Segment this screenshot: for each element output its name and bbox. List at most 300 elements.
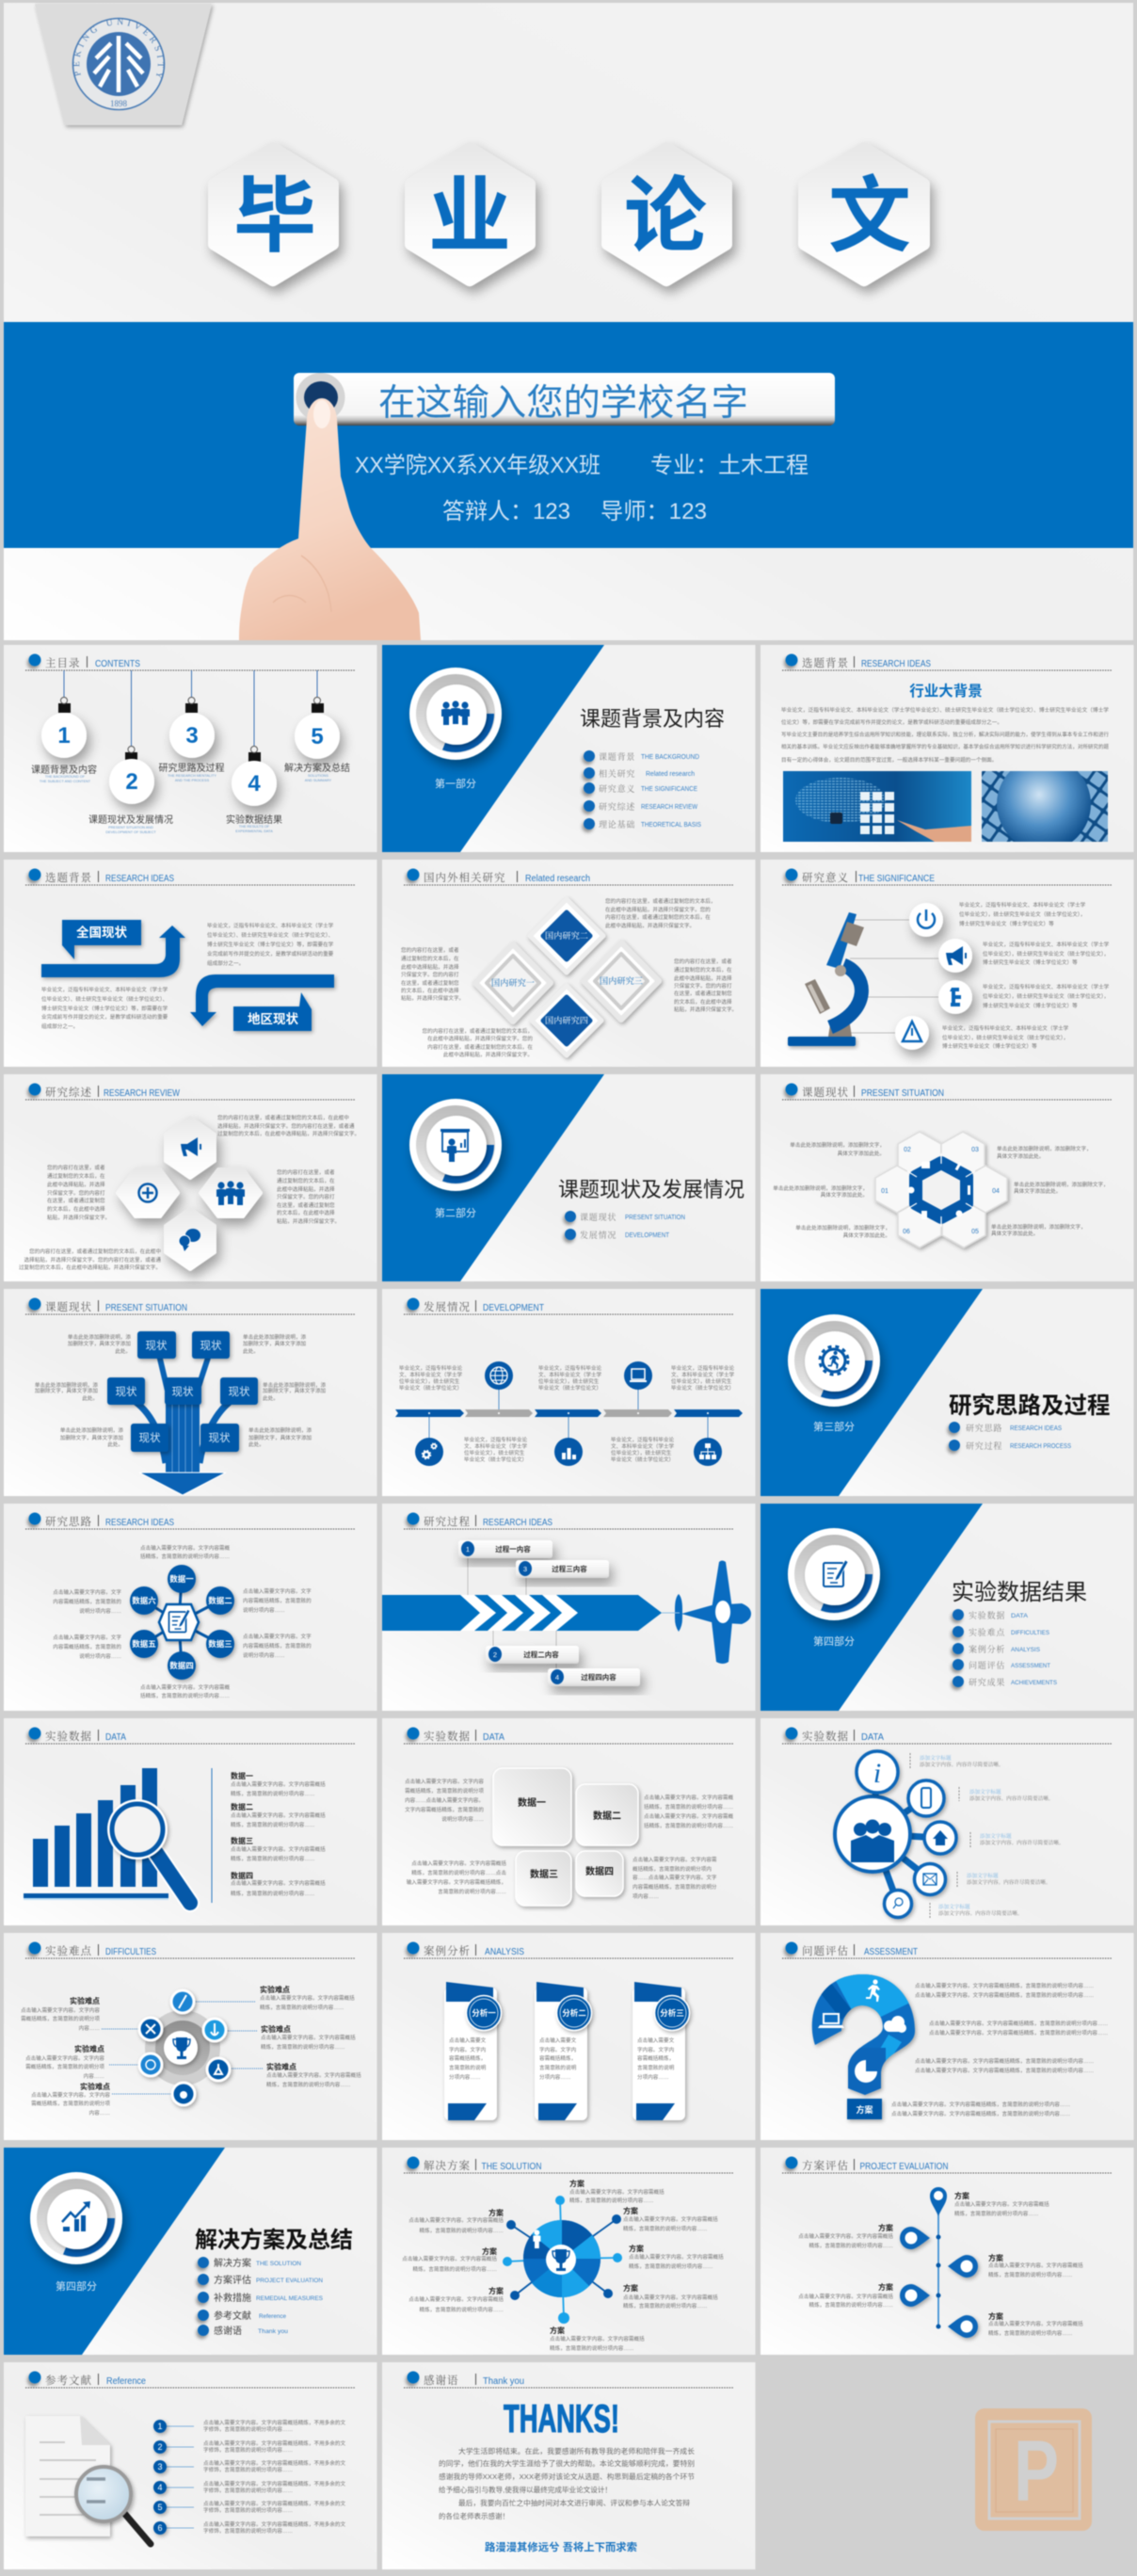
paragraph right: [207, 922, 334, 967]
list: DIFFICULTIES: [1011, 1631, 1049, 1636]
text bottom right: 具体文字添加此处。: [991, 1230, 1038, 1237]
process box 3: [516, 1560, 609, 1578]
list: 感谢语: [214, 2325, 242, 2337]
pointing hand: [239, 398, 421, 640]
text left 3: 内容……: [89, 2109, 110, 2117]
connector stems: [429, 1383, 708, 1444]
list: 研究意义: [599, 783, 635, 794]
text top left: [790, 1141, 885, 1157]
text bottom right: 点击输入需要文字内容。文字内容需概括: [623, 2294, 718, 2301]
heading: CONTENTS: [95, 659, 140, 669]
title hexagon: 业: [411, 149, 529, 280]
title hexagon: 毕: [215, 149, 332, 280]
heading: RESEARCH IDEAS: [105, 1518, 174, 1528]
square 4: 数据四: [585, 1865, 614, 1877]
text right top: 内容需概括精炼，言简意赅的: [243, 1597, 312, 1604]
list: 问题评估: [969, 1660, 1005, 1670]
subtitle: 行业大背景: [909, 683, 983, 700]
diamond top: 国内研究二: [545, 930, 588, 941]
presenter and tutor line: 导师：123: [601, 499, 707, 524]
status box labels: [115, 1339, 250, 1444]
text top: 选择粘贴，并选择只保留文字。您的内容打在这里，或者通: [217, 1122, 355, 1130]
text bottom: 您的内容打在这里，或者通过复制您的文本后，在此框中: [29, 1248, 161, 1255]
text 1: 点击输入需要文字内容。文字内容需概括精炼，言简意赅的说明分项内容……: [915, 1991, 1094, 1999]
process box 1: 过程一内容: [495, 1544, 531, 1554]
text bottom: 在此框中选择粘贴，并选择只保留文字。您的: [427, 1035, 533, 1042]
text right bottom: 内容需概括精炼，言简意赅的: [243, 1642, 312, 1650]
text left: [402, 2246, 497, 2273]
text left 3: 实验难点: [80, 2082, 110, 2091]
text top left: [408, 2208, 504, 2234]
heading: [25, 868, 355, 885]
text left 3: 点击输入需要文字内容。文字内容需概括: [798, 2293, 893, 2300]
connectors: [144, 1579, 220, 1666]
text right 1: 点击输入需要文字内容。文字内容需概括: [260, 1994, 355, 2002]
text top right: 精炼，言简意赅的说明分项内容……: [623, 2225, 708, 2232]
text bottom: 您的内容打在这里，或者通过复制您的文本后，: [423, 1027, 533, 1035]
ring icon: presentation: [409, 1099, 502, 1191]
heading: 课题现状: [45, 1300, 92, 1313]
text middle left: 单击此处添加删除说明，添加删除文字，: [773, 1184, 868, 1192]
list: THE SIGNIFICANCE: [641, 786, 697, 793]
text bottom right: 点击输入需要文字内容。文字内容需: [633, 1856, 717, 1863]
heading: 实验难点: [45, 1944, 92, 1957]
text bottom: 此框中选择粘贴，并选择只保留文字。: [443, 1051, 533, 1058]
panel: industry background slide: [761, 645, 1133, 852]
watermark stamp: P: [1014, 2423, 1059, 2520]
process box 2: 2: [493, 1650, 497, 1659]
text top 1: [399, 1364, 463, 1392]
hexagon: speech bubbles: [166, 1209, 215, 1269]
list: 解决方案: [214, 2257, 251, 2269]
text left top: [53, 1588, 121, 1615]
callout: regional status: [233, 992, 312, 1031]
heading: [782, 1083, 1112, 1100]
heading: [25, 1297, 355, 1314]
text bottom: 方案: [550, 2326, 565, 2335]
text left: 只保留文字。您的内容打: [401, 971, 459, 978]
heading: Reference: [106, 2376, 146, 2387]
watermark stamp: [975, 2408, 1092, 2531]
status box labels: 现状: [115, 1385, 137, 1398]
section title: 研究思路及过程: [949, 1393, 1111, 1419]
heading: [404, 1727, 733, 1744]
reference text: 字修饰，言简意赅的说明分项内容……: [203, 2527, 293, 2535]
connector lines: [850, 920, 955, 1033]
timeline: [395, 1409, 743, 1417]
list: ASSESSMENT: [1011, 1664, 1050, 1669]
text 5: 此处。: [107, 1441, 123, 1448]
text left bottom: 内容需概括精炼，言简意赅的: [53, 1643, 121, 1650]
callout text 4: 添加文字标题: [967, 1872, 999, 1879]
card 1: 分析一: [472, 2008, 496, 2018]
spokes: [503, 2196, 622, 2324]
section title: 实验数据结果: [952, 1580, 1087, 1605]
node icons: [139, 1990, 230, 2105]
icon: org chart: [694, 1438, 722, 1466]
list: 理论基础: [599, 819, 635, 829]
text left 1: 点击输入需要文字内容。文字内容: [21, 2006, 100, 2014]
banner arrow with chevrons: [382, 1595, 662, 1631]
text left: 点击输入需要文字内容。文字内容需概括: [402, 2255, 497, 2262]
photo: keypad and hand: [783, 771, 971, 842]
hanging ball 4: 4: [248, 771, 261, 797]
status box labels: 现状: [200, 1339, 222, 1352]
text top right: [623, 2206, 718, 2232]
heading: [782, 653, 1112, 670]
presenter and tutor line: 答辩人：123: [442, 499, 570, 524]
heading: 案例分析: [424, 1944, 471, 1957]
text right: [674, 958, 737, 1013]
list: [949, 1422, 1071, 1451]
data text 2: 精炼，言简意赅的说明分项内容……: [231, 1821, 315, 1828]
callout text 1: 添加文字标题: [920, 1754, 952, 1762]
acknowledgement paragraph: 感谢我的导师XXX老师，XXX老师对该论文从选题、构思到最后定稿的各个环节: [439, 2471, 696, 2481]
ring icon: growth chart: [30, 2172, 122, 2264]
card 1: 分项内容……: [449, 2073, 481, 2081]
bubble: info: [857, 1751, 898, 1793]
heading: 实验数据: [424, 1730, 471, 1743]
petal numbers: 02: [904, 1147, 911, 1153]
text 5: 单击此处添加删除说明，添: [60, 1426, 123, 1434]
heading: PRESENT SITUATION: [105, 1303, 187, 1313]
six hexagon petals: [875, 1132, 1007, 1248]
list: 补救措施: [214, 2292, 251, 2304]
diamond bottom: 国内研究四: [545, 1015, 588, 1025]
text left 1: [21, 1996, 100, 2032]
text middle right: 具体文字添加此处。: [1014, 1187, 1061, 1195]
text bottom right: 单击此处添加删除说明，添加删除文字，: [991, 1223, 1086, 1231]
data text 4: 点击输入需要文字内容。文字内容需概括: [231, 1879, 326, 1887]
thanks title: THANKS!: [504, 2396, 619, 2440]
heading: 选题背景: [802, 656, 849, 669]
callout text 2: 添加文字标题: [969, 1788, 1001, 1795]
text top: 方案: [569, 2179, 585, 2188]
text right: [629, 2244, 724, 2270]
section title: 课题背景及内容: [580, 707, 725, 731]
section label: 第四部分: [56, 2279, 97, 2293]
text left: [47, 1164, 110, 1221]
heading: THE SIGNIFICANCE: [858, 874, 935, 884]
panel: present situation tree slide: [4, 1289, 376, 1496]
process box 1: 1: [466, 1545, 470, 1554]
question mark chart: [811, 1973, 919, 2099]
text top: 括精炼，言简意赅的说明分项内容……: [140, 1553, 230, 1560]
text left 3: 需概括精炼，言简意赅的说明分项: [31, 2100, 110, 2107]
acknowledgement paragraph: 给予细心指引与教导,使我得以最终完成毕业论文设计！: [439, 2485, 612, 2494]
item labels: THE RESULTS OF: [239, 825, 270, 829]
college and major line: 专业：土木工程: [650, 453, 809, 478]
text bottom: 精炼，言简意赅的说明分项内容……: [550, 2344, 634, 2352]
heading: [404, 2371, 733, 2388]
list: PRESENT SITUATION: [625, 1215, 685, 1221]
text top right: 点击输入需要文字内容。文字内容需概: [644, 1794, 734, 1801]
data petals: 数据四: [169, 1661, 194, 1670]
text 1: [915, 1982, 1094, 1999]
data text 3: [231, 1836, 326, 1862]
text left 1: 需概括精炼，言简意赅的说明分项: [21, 2015, 100, 2022]
logo tab with university seal: PEKING UNIVERSITY: [73, 19, 164, 79]
callout text 5: 添加文字内容。内容许尽简要洁晰。: [938, 1909, 1023, 1917]
pin left 1: [900, 2227, 930, 2249]
text right: 的文本后，在此框中选择: [674, 998, 732, 1006]
paragraph: 位论文）等，即需要在学业完成前写作并提交的论文，是教学或科研活动的重要组成部分之一。: [781, 718, 1002, 726]
text right: 只保留文字。您的内容打: [277, 1193, 335, 1200]
heading: 主目录: [45, 657, 81, 669]
text bottom right: 方案: [623, 2283, 638, 2293]
text top: [140, 1544, 231, 1560]
paragraph right: 博士研究生毕业论文（博士学位论文）等，即需要在学: [207, 941, 334, 948]
text top: 精炼，言简意赅的说明分项内容……: [954, 2210, 1039, 2217]
text 2: 单击此处添加删除说明，添: [243, 1333, 307, 1341]
logo tab with university seal: [34, 3, 215, 130]
text top left: 点击输入需要文字内容。文字内容: [405, 1778, 484, 1785]
circle icon: triangle warning: [895, 1016, 929, 1050]
text left 3: 方案: [878, 2282, 893, 2292]
heading: 参考文献: [45, 2374, 92, 2387]
text 4: 加删除文字，具体文字添加: [263, 1387, 327, 1394]
text 4: 单击此处添加删除说明，添: [263, 1381, 327, 1389]
text right top: [243, 1587, 312, 1614]
bubble: search: [885, 1891, 911, 1917]
text 3: 博士研究生毕业论文（博士学位论文）等: [983, 1002, 1078, 1009]
text right 2: 实验难点: [261, 2024, 291, 2034]
list: 研究综述: [599, 801, 635, 812]
square 2: 数据二: [593, 1810, 621, 1822]
text right 2: 精炼，言简意赅的说明分项内容……: [988, 2271, 1073, 2278]
card 2: 容需概括精炼，: [539, 2054, 576, 2062]
panel: related research diamonds slide: [382, 860, 755, 1067]
data petals: 数据二: [208, 1596, 232, 1605]
text top right: 括精炼，言简意赅的说明分项内容……: [644, 1803, 733, 1811]
process box 4: 4: [555, 1673, 559, 1682]
text right 4: [988, 2311, 1083, 2337]
heading: [25, 2371, 355, 2388]
title hexagon: 毕: 毕: [233, 169, 316, 263]
item labels: SOLUTIONS: [308, 774, 328, 778]
text bottom 2: 毕业论文，泛指专科毕业论: [611, 1436, 675, 1443]
list: 相关研究: [599, 768, 635, 779]
text left: 通过复制您的文本后，在: [401, 955, 459, 962]
panel: references slide: [4, 2362, 376, 2569]
box: solution: [847, 2099, 882, 2119]
text 3: 单击此处添加删除说明，添: [35, 1381, 98, 1389]
list: ANALYSIS: [1011, 1648, 1040, 1653]
panel: thanks slide: [382, 2362, 755, 2569]
section title: 解决方案及总结: [195, 2227, 353, 2253]
list: 课题背景: [599, 751, 635, 762]
text 1: 毕业论文，泛指专科毕业论文、本科毕业论文（学士学: [959, 901, 1086, 909]
icon: airplane: [662, 1561, 751, 1664]
process box 2: 过程二内容: [523, 1650, 559, 1659]
text 4: 毕业论文，泛指专科毕业论文、本科毕业论文（学士学: [942, 1024, 1069, 1032]
bubble: info: i: [873, 1758, 881, 1789]
heading: RESEARCH IDEAS: [483, 1518, 552, 1528]
numbered list: [153, 2420, 194, 2535]
text middle right: [1014, 1181, 1109, 1195]
status boxes: [107, 1331, 258, 1452]
text right 2: [988, 2253, 1083, 2278]
text 3: 此处。: [82, 1394, 98, 1402]
petal numbers: 04: [992, 1188, 1000, 1195]
callout text 1: 添加文字内容。内容许尽简要洁晰。: [920, 1761, 1004, 1768]
paragraph left: 毕业论文，泛指专科毕业论文、本科毕业论文（学士学: [41, 986, 168, 993]
text top right: 点击输入需要文字内容。文字内容需概: [644, 1812, 734, 1820]
hanging ball 3: [169, 670, 215, 758]
panel: research process plane slide: [382, 1504, 755, 1711]
process box 1: [458, 1540, 552, 1558]
text 2: 位毕业论文），硕士研究生毕业论文（硕士学位论文），: [983, 950, 1109, 958]
panel: section two slide: [382, 1074, 755, 1281]
panel: significance microscope slide: [761, 860, 1133, 1067]
text right bottom: [243, 1633, 312, 1659]
heading: Related research: [525, 874, 590, 884]
hanging ball 2: [109, 670, 154, 804]
text right 2: [261, 2024, 356, 2051]
text bottom left: 精炼，言简意赅的说明分项内容……: [419, 2306, 504, 2313]
text 5: [60, 1426, 123, 1448]
heading: Thank you: [483, 2376, 524, 2387]
list: 研究成果: [969, 1677, 1005, 1687]
list: DATA: [1011, 1614, 1028, 1619]
heading: RESEARCH IDEAS: [861, 659, 931, 669]
heading: ANALYSIS: [485, 1947, 524, 1957]
data petals: 数据一: [169, 1574, 194, 1584]
card 1: 字内容。文字内: [449, 2046, 487, 2053]
icon: bars: [554, 1438, 583, 1466]
text right 2: 点击输入需要文字内容。文字内容需概括: [261, 2034, 356, 2041]
panel: solution wheel slide: [382, 2148, 755, 2355]
text top right: 在此框中选择粘贴，并选择只保留文字。您的: [605, 906, 711, 913]
heading: 方案评估: [802, 2159, 849, 2172]
text right 4: 方案: [988, 2311, 1003, 2321]
card 3: 分项内容……: [637, 2073, 669, 2081]
heading: [25, 1727, 355, 1744]
process box 3: 3: [523, 1565, 527, 1573]
text top right: 方案: [623, 2206, 638, 2215]
college and major line: XX学院XX系XX年级XX班: [355, 453, 601, 478]
text top left: 精炼，言简意赅的说明分项内容……: [419, 2227, 504, 2234]
text top right: 具体文字添加此处。: [997, 1152, 1044, 1160]
text left top: 内容需概括精炼，言简意赅的: [53, 1598, 121, 1605]
text top right: 括精炼，言简意赅的说明分项内容……: [644, 1822, 733, 1829]
section label: 第二部分: [435, 1206, 476, 1219]
card 3: [633, 1982, 689, 2120]
callout: regional status: 地区现状: [248, 1011, 298, 1026]
heading: 研究意义: [802, 871, 849, 884]
text top 2: 位毕业论文），硕士研究生: [538, 1377, 600, 1385]
text 6: [248, 1426, 312, 1448]
text right 1: 精炼，言简意赅的说明分项内容……: [260, 2004, 344, 2011]
card 2: [535, 1982, 591, 2120]
heading: 研究综述: [45, 1086, 92, 1099]
heading: [404, 868, 733, 885]
text right: 粘贴，并选择只保留文字。: [277, 1217, 340, 1225]
text 2: 点击输入需要文字内容。文字内容需概括精炼，言简意赅的说明分项内容……: [929, 2020, 1108, 2027]
text 3: 点击输入需要文字内容。文字内容需概括精炼，言简意赅的说明分项内容……: [915, 2057, 1094, 2065]
hexagon: plus: [118, 1169, 178, 1216]
text 3: 位毕业论文），硕士研究生毕业论文（硕士学位论文），: [983, 992, 1109, 1000]
status box labels: 现状: [145, 1339, 168, 1352]
text top: [954, 2191, 1049, 2217]
text bottom 1: 位毕业论文），硕士研究生: [464, 1449, 525, 1457]
paragraph: 目有一定的心得体会，论文题目的范围不宜过宽，一般选择本学科某一重要问题的一个侧面。: [781, 756, 997, 764]
panel: data bar chart slide: [4, 1718, 376, 1925]
text right 3: 精炼，言简意赅的说明分项内容……: [266, 2081, 351, 2088]
diamond right: [584, 942, 659, 1020]
heading: [782, 2156, 1112, 2173]
text left: 此框中选择粘贴，并选择: [47, 1181, 105, 1188]
item labels: EXPERIMENTAL DATA: [235, 829, 273, 833]
card 1: 点击输入需要文: [449, 2037, 487, 2044]
reference text: 字修饰，言简意赅的说明分项内容……: [203, 2466, 293, 2473]
heading: PROJECT EVALUATION: [860, 2162, 949, 2172]
text bottom: 括精炼，言简意赅的说明分项内容……: [140, 1692, 230, 1699]
panel: contents slide: [4, 645, 376, 852]
text top 1: 位毕业论文），硕士研究生: [399, 1377, 460, 1385]
text 1: 加删除文字，具体文字添加: [68, 1340, 131, 1347]
panel: section five slide: [4, 2148, 376, 2355]
text top: 过复制您的文本后，在此框中选择粘贴，并选择只保留文字。: [217, 1130, 360, 1137]
text top left: [405, 1778, 484, 1823]
paragraph left: 博士研究生毕业论文（博士学位论文）等，即需要在学: [41, 1005, 168, 1012]
acknowledgement paragraph: 最后，我要向百忙之中抽时间对本文进行审阅、评议和参与本人论文答辩: [458, 2498, 691, 2507]
data text 4: [231, 1871, 326, 1897]
heading: 研究思路: [45, 1515, 92, 1528]
icon: gears: [415, 1438, 443, 1466]
heading: 课题现状: [802, 1086, 849, 1099]
list: REMEDIAL MEASURES: [256, 2296, 323, 2302]
petal numbers: 03: [971, 1147, 979, 1153]
title hexagon: 论: [608, 149, 726, 280]
blue band: [4, 322, 1133, 548]
list: ACHIEVEMENTS: [1011, 1681, 1057, 1686]
text 1: [959, 901, 1086, 927]
panel: section three slide: [761, 1289, 1133, 1496]
text bottom left: [407, 1860, 506, 1895]
list: THE SOLUTION: [256, 2262, 301, 2267]
item labels: 实验数据结果: [226, 813, 282, 826]
list: 案例分析: [969, 1644, 1005, 1654]
text left: 的文本后，在此框中选择: [401, 987, 459, 994]
heading: [782, 1727, 1112, 1744]
arrow down: [190, 974, 334, 1026]
stem lines: [468, 1558, 556, 1668]
text right 1: [260, 1985, 355, 2011]
list: 发展情况: [580, 1230, 617, 1240]
paragraph right: 组成部分之一。: [207, 959, 244, 967]
text 2: 点击输入需要文字内容。文字内容需概括精炼，言简意赅的说明分项内容……: [929, 2029, 1108, 2037]
list: 研究过程: [966, 1441, 1002, 1451]
data petals: 数据五: [132, 1639, 156, 1649]
text 6: 加删除文字，具体文字添加: [248, 1434, 312, 1441]
reference text: 点击输入需要文字内容。文字内容需概括精炼，不用多余的文: [203, 2480, 345, 2487]
text top right: 您的内容打在这里，或者通过复制您的文本后，: [605, 897, 715, 905]
text top: 方案: [954, 2191, 969, 2200]
acknowledgement paragraph: 的各位老师表示感谢！: [439, 2511, 509, 2520]
section title: 课题现状及发展情况: [558, 1178, 745, 1201]
text top left: 具体文字添加此处。: [838, 1150, 885, 1157]
central trophy disc: [145, 2010, 220, 2085]
blue slanted panel: [761, 1504, 983, 1711]
status box labels: 现状: [171, 1385, 194, 1398]
text bottom: [140, 1683, 231, 1699]
numbered list: 2: [157, 2442, 163, 2452]
panel: development timeline slide: [382, 1289, 755, 1496]
title hexagon: 论: 论: [624, 169, 707, 263]
text bottom 2: 位毕业论文），硕士研究生: [611, 1449, 672, 1457]
callout text 3: [970, 1832, 1065, 1847]
